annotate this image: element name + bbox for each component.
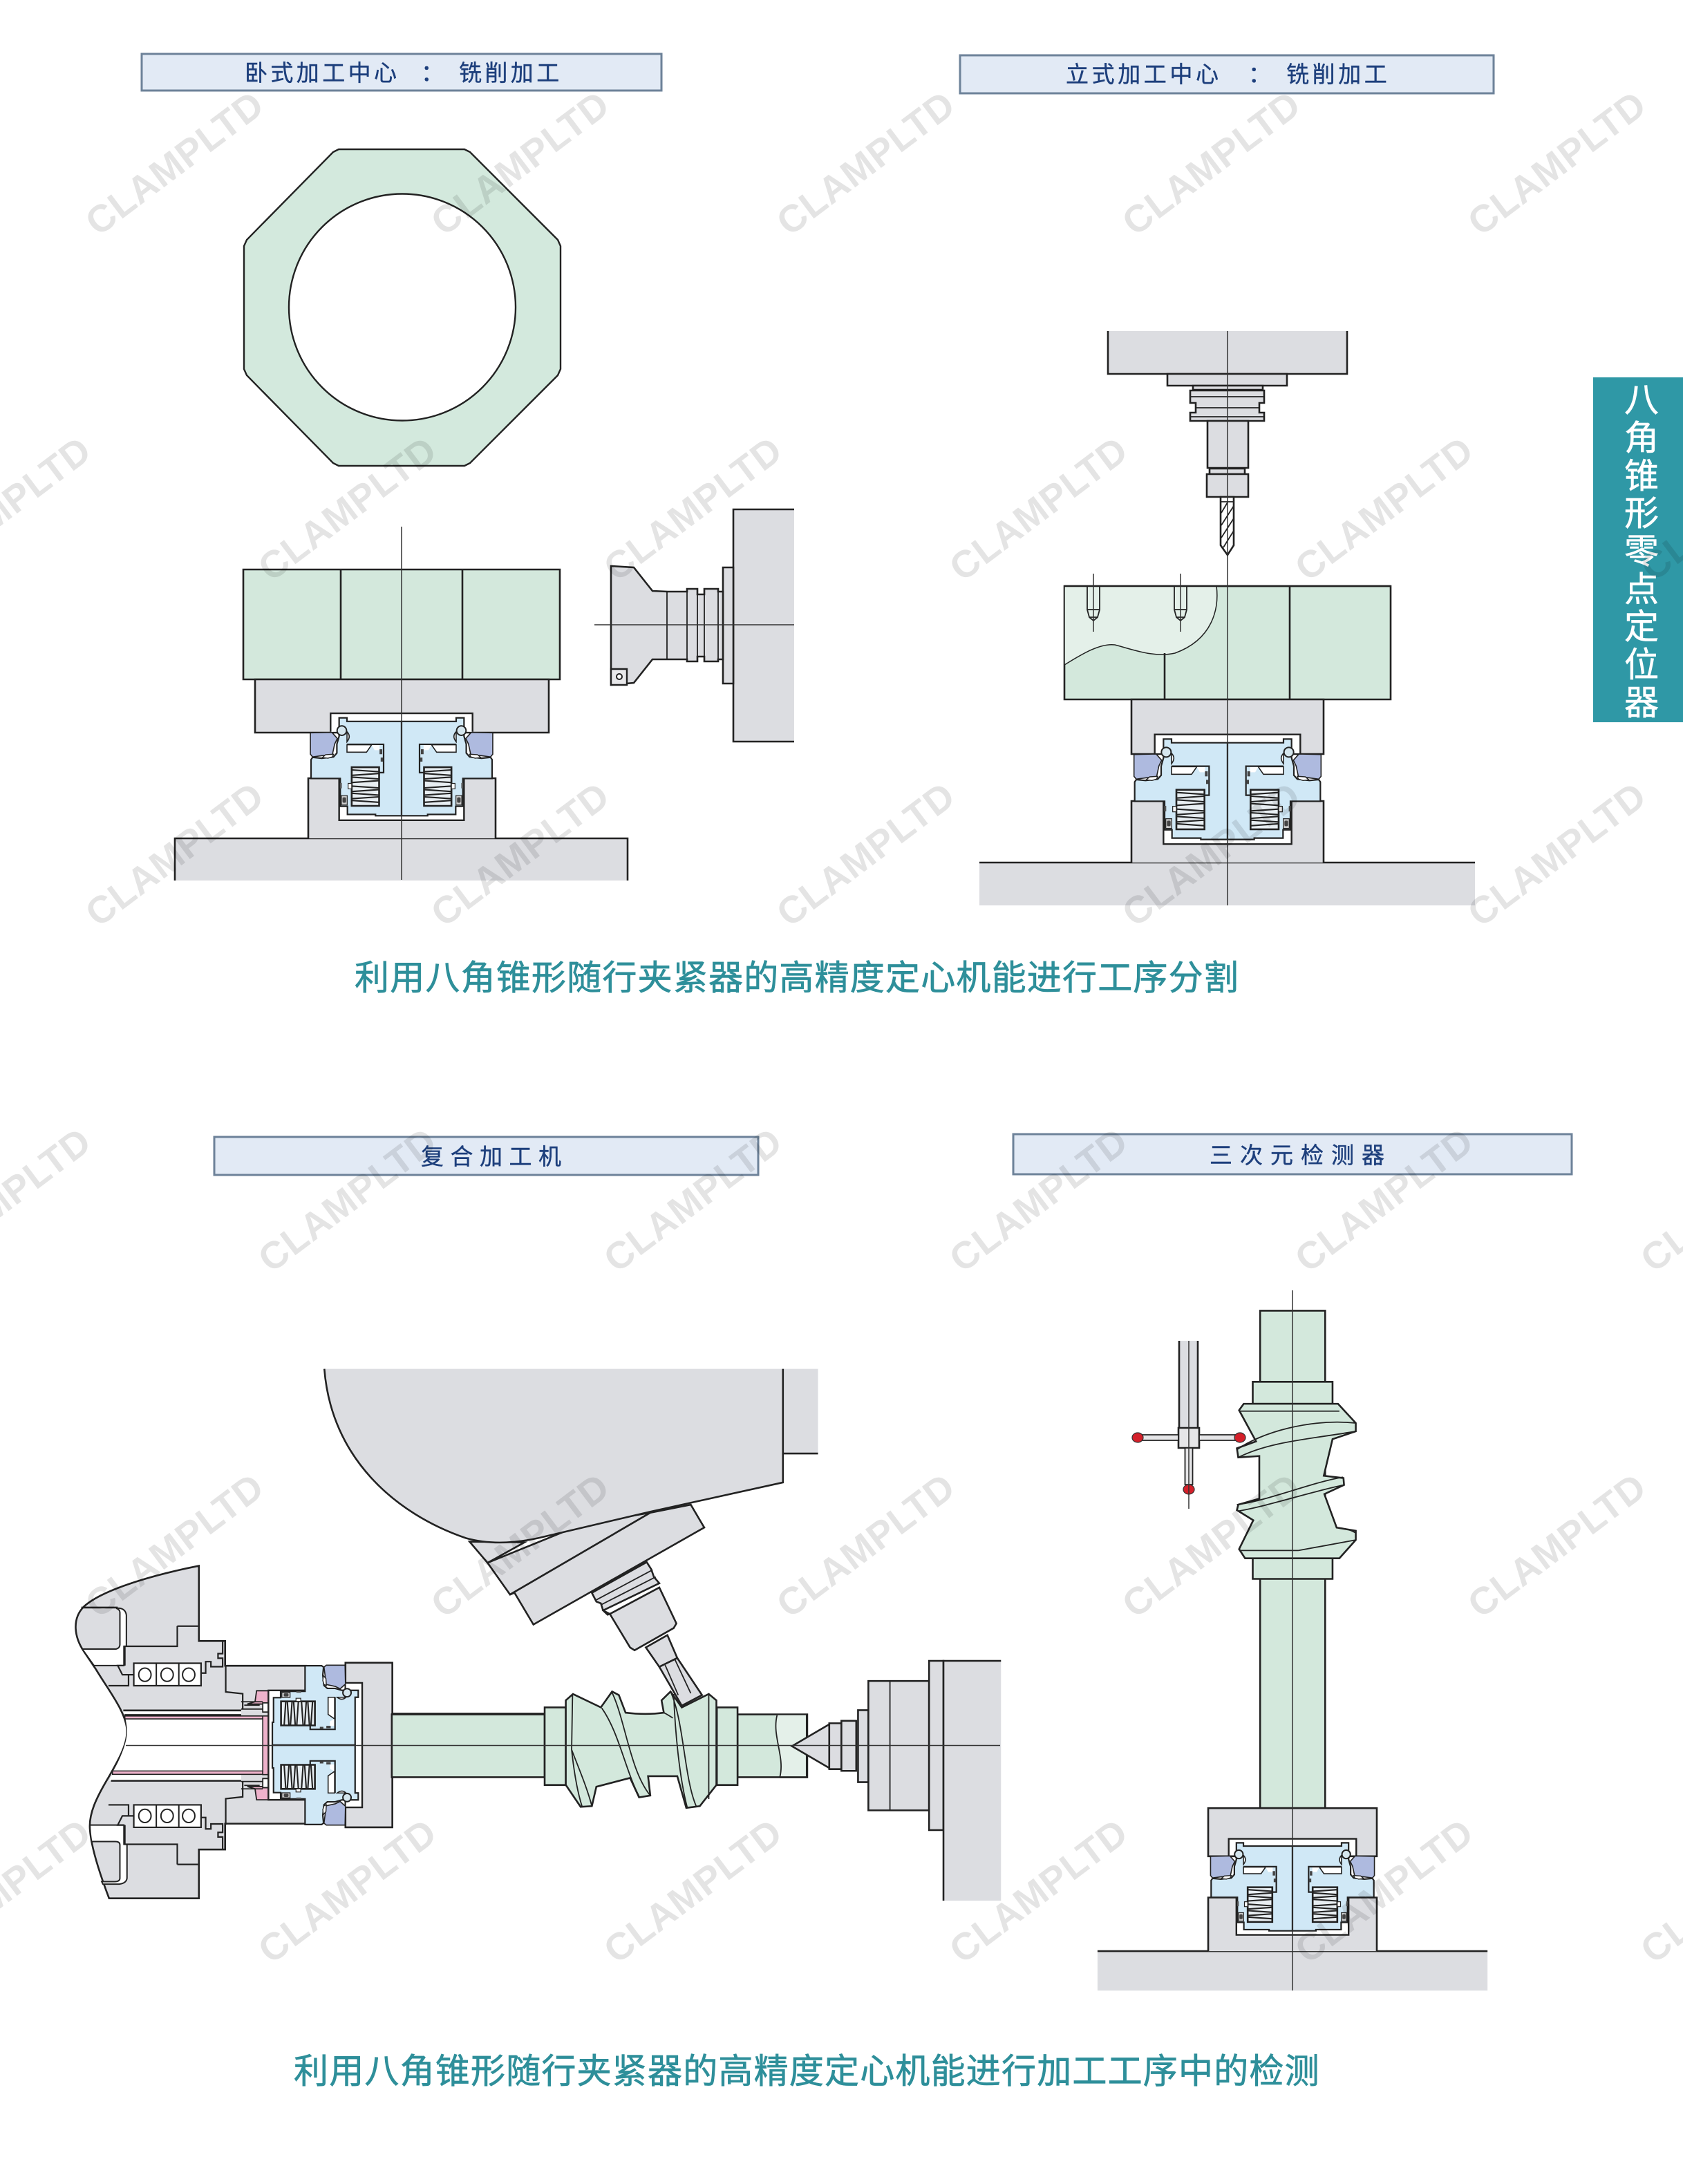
banner: horizontal machining center: 卧式加工中心 bbox=[245, 60, 399, 86]
watermark grid: CLAMPLTD bbox=[1460, 82, 1654, 244]
diagram: compound machine clamp bbox=[268, 1665, 362, 1825]
diagram: coordinate measuring workpiece bbox=[1098, 1310, 1487, 1990]
watermark grid: CLAMPLTD bbox=[1114, 1465, 1308, 1626]
upper pallet bbox=[1131, 699, 1324, 754]
banner: horizontal machining center bbox=[142, 54, 661, 91]
watermark grid: CLAMPLTD bbox=[77, 1465, 272, 1626]
side tab: 位 bbox=[1624, 646, 1659, 684]
side tab: 器 bbox=[1624, 684, 1659, 722]
watermark grid: CLAMPLTD bbox=[250, 1810, 444, 1972]
watermark grid: CLAMPLTD bbox=[941, 428, 1136, 590]
fixture C-block bbox=[346, 1663, 393, 1827]
side tab: 形 bbox=[1624, 494, 1659, 533]
diagram: compound machine head and screw bbox=[324, 1369, 1001, 1901]
upper cavity bbox=[82, 1608, 126, 1666]
watermark grid: CLAMPLTD bbox=[769, 82, 963, 244]
watermark grid: CLAMPLTD bbox=[769, 773, 963, 935]
watermark grid: CLAMPLTD bbox=[1287, 1810, 1481, 1972]
vertical shaft bbox=[1260, 1310, 1325, 1808]
diagram: compound machine spindle chuck bbox=[75, 1566, 546, 1899]
watermark grid: CLAMPLTD bbox=[250, 428, 444, 590]
tool holder bbox=[1190, 390, 1264, 421]
coordinate measuring axis bbox=[1292, 1290, 1293, 1990]
side tab: 定 bbox=[1624, 608, 1659, 646]
banner: horizontal machining center: ： bbox=[421, 60, 444, 86]
watermark grid: CLAMPLTD bbox=[1287, 428, 1481, 590]
upper bearings bbox=[109, 1626, 268, 1712]
banner: compound machine: 复合加工机 bbox=[421, 1144, 568, 1169]
tilted head lower pieces bbox=[469, 1542, 525, 1563]
threaded hole 2 bbox=[1174, 586, 1187, 621]
banner: vertical machining center: 立式加工中心 bbox=[1066, 62, 1222, 87]
green shaft and collars bbox=[392, 1715, 545, 1777]
side tab: 点 bbox=[1624, 570, 1659, 609]
spindle plate bbox=[733, 509, 794, 742]
watermark grid: CLAMPLTD bbox=[1114, 773, 1308, 935]
compound machine axis bbox=[126, 1744, 1000, 1746]
upper pallet bbox=[1208, 1808, 1377, 1856]
light cutaway region bbox=[1064, 586, 1217, 665]
banner: coordinate measuring machine bbox=[1013, 1134, 1572, 1174]
tilted tool holder bbox=[592, 1562, 677, 1650]
watermark grid: CLAMPLTD bbox=[596, 1810, 790, 1972]
diagram: octagonal workpiece top view bbox=[244, 149, 561, 466]
drill bit bbox=[1221, 497, 1234, 555]
diagram: milling tool on horizontal spindle bbox=[594, 509, 794, 742]
diagram: vertical center spindle and drill bbox=[1108, 331, 1347, 555]
watermark grid: CLAMPLTD bbox=[1287, 1119, 1481, 1281]
watermark grid: CLAMPLTD bbox=[77, 82, 272, 244]
clamp cross-section bbox=[1134, 735, 1321, 844]
side tab: 八 bbox=[1624, 381, 1659, 420]
lower fixture bbox=[308, 778, 496, 838]
spindle head bbox=[324, 1369, 818, 1543]
pink draw tube bbox=[113, 1716, 268, 1775]
diagram: vertical center workpiece with cutaway bbox=[1064, 574, 1391, 699]
banner: horizontal machining center: 铣削加工 bbox=[459, 60, 563, 86]
banner: compound machine bbox=[214, 1137, 758, 1175]
watermark grid: CLAMPLTD bbox=[1460, 773, 1654, 935]
spindle head bbox=[1108, 331, 1347, 374]
watermark grid: CLAMPLTD bbox=[941, 1810, 1136, 1972]
side tab: 角 bbox=[1624, 419, 1659, 458]
white bore bbox=[109, 1711, 263, 1781]
tilted end mill bbox=[659, 1658, 702, 1706]
watermark grid: CLAMPLTD bbox=[250, 1119, 444, 1281]
watermark grid: CLAMPLTD bbox=[423, 773, 617, 935]
banner: vertical machining center bbox=[960, 55, 1494, 93]
watermark grid: CLAMPLTD bbox=[941, 1119, 1136, 1281]
milling cutter bbox=[611, 566, 723, 685]
lower bearings bbox=[109, 1778, 268, 1865]
caption: process separation: 利用八角锥形随行夹紧器的高精度定心机能进行工序分割 bbox=[355, 959, 1239, 997]
green shaft stub bbox=[393, 1713, 546, 1776]
watermark grid: CLAMPLTD bbox=[596, 428, 790, 590]
side tab: 锥 bbox=[1624, 457, 1659, 496]
ground base bbox=[1098, 1951, 1487, 1990]
lower fixture bbox=[1208, 1898, 1377, 1951]
banner: vertical machining center: 铣削加工 bbox=[1286, 62, 1390, 87]
green workpiece bbox=[1064, 586, 1391, 699]
watermark grid: CLAMPLTD bbox=[769, 1465, 963, 1626]
upper pallet bbox=[255, 679, 549, 733]
diagram: touch probe bbox=[1132, 1341, 1245, 1509]
center axis bbox=[401, 527, 402, 880]
ground base bbox=[979, 863, 1475, 905]
tailstock bbox=[792, 1724, 829, 1768]
side tab: 零 bbox=[1624, 532, 1659, 571]
watermark grid: CLAMPLTD bbox=[423, 1465, 617, 1626]
caption: inspection during machining: 利用八角锥形随行夹紧器的高精度定心机能进行加工工序中的检测 bbox=[294, 2052, 1320, 2091]
threaded hole 1 bbox=[1087, 586, 1100, 621]
helical screw bbox=[1237, 1404, 1356, 1559]
green workpiece block bbox=[243, 569, 560, 679]
watermark grid: CLAMPLTD bbox=[77, 773, 272, 935]
lower fixture bbox=[1131, 801, 1324, 863]
helical screw bbox=[566, 1691, 717, 1808]
ground base bbox=[175, 838, 628, 881]
lower cavity bbox=[90, 1825, 127, 1884]
chuck housing bbox=[75, 1566, 306, 1899]
diagram: vertical center clamp assembly bbox=[979, 331, 1475, 905]
side tab bbox=[1593, 377, 1683, 722]
center axis bbox=[1227, 331, 1228, 905]
diagram: coordinate measuring clamp bbox=[1210, 1839, 1375, 1935]
diagram: horizontal center clamp assembly bbox=[175, 527, 628, 881]
banner: vertical machining center: ： bbox=[1248, 62, 1271, 87]
clamp cross-section bbox=[310, 713, 493, 820]
watermark grid: CLAMPLTD bbox=[596, 1119, 790, 1281]
banner: coordinate measuring machine: 三次元检测器 bbox=[1210, 1142, 1392, 1168]
watermark grid: CLAMPLTD bbox=[423, 82, 617, 244]
watermark grid: CLAMPLTD bbox=[1460, 1465, 1654, 1626]
watermark grid: CLAMPLTD bbox=[1114, 82, 1308, 244]
